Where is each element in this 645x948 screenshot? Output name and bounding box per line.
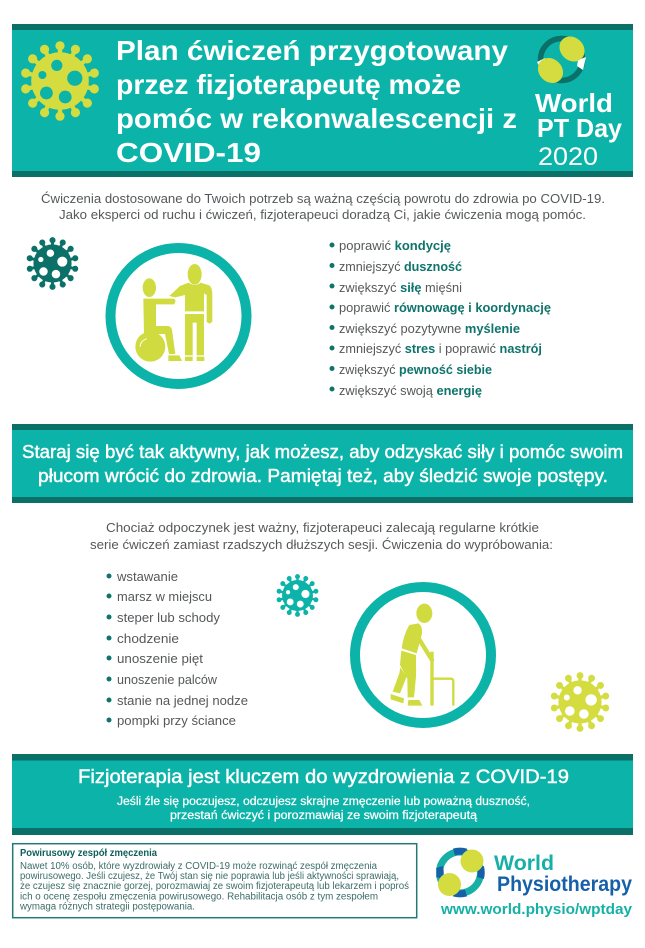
logo: World PT Day (533, 31, 623, 171)
bullet list: benefits: zwiększyć swoją energię (339, 384, 482, 398)
banner: physiotherapy is key: Jeśli źle się poczujesz, odczujesz skrajne zmęczenie lub poważną duszność, (117, 796, 530, 808)
bullet list: exercises: wstawanie (116, 570, 178, 584)
banner: stay active: Staraj się być tak aktywny, jak możesz, aby odzyskać siły i pomóc swoim (22, 442, 623, 462)
callout: post-viral fatigue syndrome: że czujesz się znacznie gorzej, porozmawiaj ze swoim fizjoterapeutą lub lekarzem i poproś (20, 881, 409, 892)
bullet list: exercises: stanie na jednej nodze (117, 694, 248, 708)
banner: physiotherapy is key: przestań ćwiczyć i porozmawiaj ze swoim fizjoterapeutą (170, 810, 478, 822)
callout: post-viral fatigue syndrome: wymaga różnych strategii postępowania. (19, 902, 195, 912)
title: przez fizjoterapeutę może (116, 69, 461, 100)
callout: post-viral fatigue syndrome: Powirusowy zespół zmęczenia (20, 848, 157, 859)
banner: physiotherapy is key (12, 754, 633, 835)
icon: physiotherapist with patient in circle (110, 248, 246, 384)
title (116, 35, 517, 168)
title: COVID-19 (116, 137, 261, 168)
bullet list: benefits: poprawić kondycję (339, 239, 451, 253)
icon: teal virus (276, 574, 319, 617)
callout: post-viral fatigue syndrome: powirusowego. Jeśli czujesz, że Twój stan się nie poprawia lub jeśli aktywności sprawiają, (20, 871, 399, 882)
callout: post-viral fatigue syndrome: ich o ocenę zespołu zmęczenia powirusowego. Rehabilitacja osób z tym zespołem (20, 892, 378, 902)
bullet list: benefits: zmniejszyć duszność (339, 260, 462, 274)
icon: yellow virus small (550, 672, 610, 732)
bullet list: exercises: pompki przy ściance (117, 714, 236, 728)
logo: World Physiotherapy: Physiotherapy (497, 873, 632, 896)
bullet list: exercises: chodzenie (117, 632, 179, 646)
advice text: serie ćwiczeń zamiast rzadszych dłuższych sesji. Ćwiczenia do wypróbowania: (90, 537, 553, 552)
bullet list: exercises: unoszenie pięt (117, 652, 204, 666)
advice text: Chociaż odpoczynek jest ważny, fizjoterapeuci zalecają regularne krótkie (106, 521, 539, 535)
banner: stay active (12, 424, 633, 503)
bullet list: benefits: poprawić równowagę i koordynację (339, 301, 551, 315)
bullet list: exercises: marsz w miejscu (117, 590, 212, 604)
bullet list: benefits: zwiększyć siłę mięśni (339, 281, 462, 295)
logo: World PT Day: 2020 (538, 143, 598, 171)
icon: elderly person with walker in circle (355, 587, 491, 723)
bullet list: benefits: zmniejszyć stres i poprawić nastrój (339, 342, 542, 356)
bullet list: exercises: steper lub schody (117, 611, 221, 625)
logo: World Physiotherapy: World (494, 852, 554, 875)
callout: post-viral fatigue syndrome (13, 844, 417, 918)
banner: stay active: płucom wrócić do zdrowia. Pamiętaj też, aby śledzić swoje postępy. (38, 466, 608, 486)
bullet list: benefits (330, 239, 551, 398)
intro text: Jako eksperci od ruchu i ćwiczeń, fizjoterapeuci doradzą Ci, jakie ćwiczenia mogą pomóc. (59, 208, 586, 222)
title: Plan ćwiczeń przygotowany (116, 35, 508, 66)
callout: post-viral fatigue syndrome: Nawet 10% osób, które wyzdrowiały z COVID-19 może rozwinąć zespół zmęczenia (20, 861, 377, 872)
icon: dark virus (26, 237, 79, 290)
logo: World Physiotherapy (438, 850, 633, 918)
bullet list: exercises: unoszenie palców (117, 673, 218, 687)
bullet list: benefits: zwiększyć pewność siebie (339, 363, 492, 377)
intro text: Ćwiczenia dostosowane do Twoich potrzeb są ważną częścią powrotu do zdrowia po COVID-19. (41, 191, 605, 206)
logo: World PT Day: PT Day (537, 113, 623, 143)
header banner (12, 24, 633, 177)
icon: yellow virus (20, 41, 100, 121)
title: pomóc w rekonwalescencji z (116, 103, 517, 134)
bullet list: benefits: zwiększyć pozytywne myślenie (339, 322, 520, 336)
advice text (90, 521, 553, 552)
banner: physiotherapy is key: Fizjoterapia jest kluczem do wyzdrowienia z COVID-19 (78, 767, 569, 788)
logo: World PT Day: World (535, 88, 613, 118)
bullet list: exercises (106, 570, 248, 728)
logo: World Physiotherapy: www.world.physio/wptday (440, 901, 633, 918)
intro text (41, 191, 605, 222)
